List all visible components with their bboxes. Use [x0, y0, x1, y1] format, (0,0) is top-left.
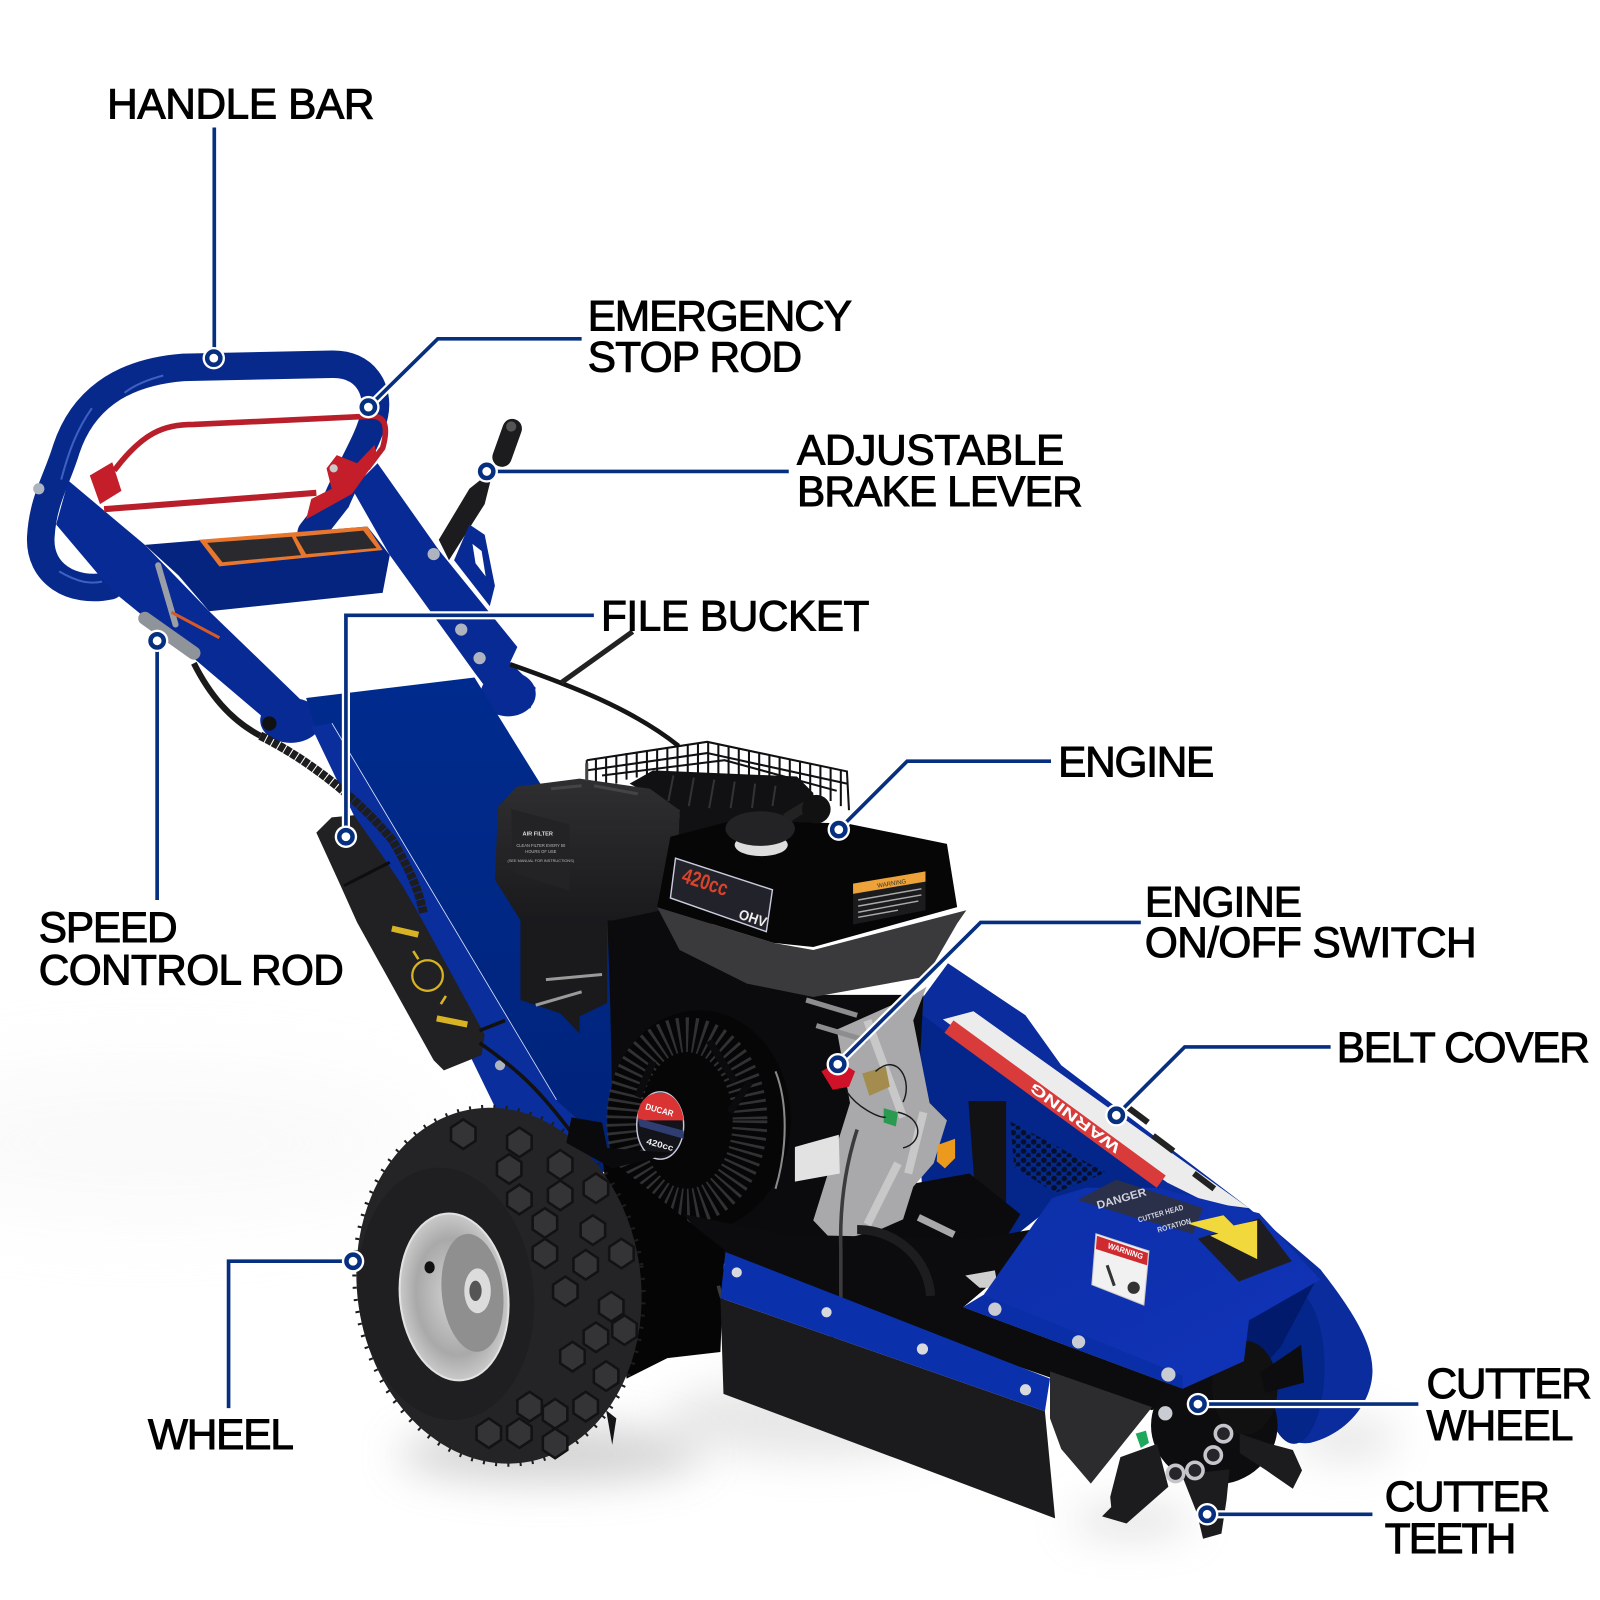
wires — [847, 1065, 918, 1148]
red on/off switch — [821, 1061, 855, 1090]
danger label — [1078, 1180, 1203, 1235]
420cc tank label: OHV — [737, 907, 769, 931]
warning sticker — [943, 1011, 1249, 1208]
callout: emergency stop rod: STOP ROD — [588, 333, 802, 380]
muffler wire guard — [587, 742, 849, 810]
red emergency stop rod — [90, 416, 385, 519]
tank warning label: WARNING — [877, 878, 907, 890]
black rubber skirt — [720, 1298, 1055, 1518]
file bucket cylinder — [316, 815, 485, 1070]
control cable — [194, 663, 260, 736]
hood flange — [963, 1295, 1183, 1389]
lower cable near bucket — [480, 1020, 571, 1133]
danger label: CUTTER HEAD — [1137, 1203, 1185, 1224]
hub — [436, 1231, 509, 1355]
callout: cutter wheel — [1187, 1360, 1592, 1449]
Ducar badge — [637, 1092, 684, 1159]
bolt and handle on deck — [857, 1217, 998, 1296]
rotation arrow panel — [1198, 1218, 1292, 1282]
frame cross plate — [145, 527, 390, 611]
callout: cutter teeth — [1196, 1473, 1550, 1562]
fuel cap — [726, 795, 831, 856]
callout: handle bar: HANDLE BAR — [107, 80, 374, 127]
420cc tank label — [670, 858, 772, 932]
callout: cutter wheel: WHEEL — [1427, 1402, 1573, 1449]
callout: belt cover — [1105, 1024, 1590, 1127]
warning sticker: WARNING — [1027, 1079, 1124, 1156]
callout: handle bar — [107, 80, 374, 369]
rod — [561, 632, 633, 683]
muffler — [630, 770, 816, 903]
tire — [334, 1089, 664, 1482]
orange safety decal — [199, 527, 383, 566]
callout: engine on/off switch: ENGINE — [1145, 878, 1302, 925]
pivot joint — [260, 698, 321, 743]
air filter: AIR FILTER — [523, 832, 553, 838]
belt cover back plate — [914, 963, 1372, 1443]
engine base deck — [684, 1214, 1183, 1410]
Ducar badge: DUCAR — [644, 1101, 675, 1119]
air filter — [495, 763, 680, 920]
callout: belt cover: BELT COVER — [1337, 1024, 1590, 1071]
callout: engine — [828, 739, 1214, 841]
callout: wheel — [148, 1250, 364, 1458]
floor shadows — [0, 1071, 1398, 1535]
air filter: (SEE MANUAL FOR INSTRUCTIONS) — [508, 858, 575, 863]
callout: speed control rod: SPEED — [39, 904, 178, 951]
frame right arm — [352, 463, 536, 713]
callout: emergency stop rod: EMERGENCY — [588, 293, 852, 340]
rim — [392, 1208, 517, 1386]
fuel tank top — [657, 820, 957, 947]
inner blue panel — [914, 1009, 1167, 1240]
tire sidewall — [345, 1159, 546, 1429]
green connector — [884, 1108, 898, 1127]
callout: file bucket: FILE BUCKET — [601, 593, 869, 640]
flange — [311, 723, 587, 1143]
engine upper parts — [806, 1000, 867, 1041]
callout: cutter teeth: TEETH — [1385, 1515, 1516, 1562]
callout: engine: ENGINE — [1058, 739, 1214, 786]
420cc tank label: 420cc — [679, 864, 731, 901]
yellow arrow — [1188, 1215, 1257, 1259]
main frame left arm — [56, 481, 318, 731]
wheel bracket — [566, 1117, 673, 1168]
speed control lever — [145, 565, 219, 653]
orange fuel knob — [937, 1139, 955, 1168]
ribbed hose — [260, 736, 423, 913]
pivot joint right — [481, 671, 536, 716]
black block behind wheel — [602, 1153, 724, 1379]
engine backing — [607, 898, 1020, 1307]
carburetor — [520, 920, 607, 1034]
engine body — [610, 927, 863, 1240]
air filter: CLEAN FILTER EVERY 50 — [516, 843, 566, 848]
cutter teeth — [1240, 1434, 1302, 1489]
engine white sticker — [795, 1135, 840, 1182]
bottom tooth — [1182, 1469, 1230, 1539]
left tooth — [1102, 1444, 1168, 1523]
cutter wheel — [1102, 1337, 1304, 1539]
callout: speed control rod: CONTROL ROD — [39, 947, 344, 994]
silver highlights — [867, 1020, 923, 1224]
bolts on frame — [33, 483, 505, 1070]
wheel — [332, 1088, 666, 1484]
cable from switch to skirt — [718, 1130, 857, 1356]
strip bolts — [732, 1267, 1031, 1395]
silver engine block — [813, 987, 947, 1242]
tire spikes — [332, 1088, 666, 1484]
valve — [424, 1261, 435, 1273]
gold box — [862, 1066, 890, 1096]
callout: emergency stop rod — [357, 293, 852, 418]
callout: speed control rod — [39, 630, 344, 994]
centre blue panel — [306, 678, 622, 1173]
vent holes — [1010, 1121, 1106, 1193]
air filter: HOURS OF USE — [525, 849, 557, 854]
green tag — [1136, 1431, 1149, 1448]
side skirt — [1050, 1371, 1152, 1484]
callout: adjustable brake lever: ADJUSTABLE — [797, 426, 1064, 473]
stump grinder machine — [33, 364, 1372, 1539]
black throttle cable — [510, 664, 679, 746]
cutter hood — [963, 1188, 1320, 1389]
drum inner disc — [1263, 1291, 1324, 1444]
panel white edge line — [332, 723, 556, 1100]
handle bar tube — [41, 364, 375, 588]
callout: engine on/off switch: ON/OFF SWITCH — [1145, 919, 1477, 966]
danger label: ROTATION — [1156, 1216, 1192, 1235]
callout: wheel: WHEEL — [148, 1411, 294, 1458]
brake lever — [439, 421, 516, 606]
callout: adjustable brake lever: BRAKE LEVER — [797, 468, 1083, 515]
hood bolts — [988, 1303, 1176, 1420]
tank warning label — [853, 871, 926, 924]
callout: cutter wheel: CUTTER — [1427, 1360, 1592, 1407]
callout: engine on/off switch — [827, 878, 1477, 1076]
muffler fins — [668, 776, 776, 808]
hood mouth shadow — [1240, 1276, 1318, 1393]
black mount post — [968, 1101, 1006, 1239]
hood warning sticker: WARNING — [1107, 1241, 1144, 1261]
hood warning sticker — [1092, 1234, 1149, 1305]
carbide nuts — [1167, 1426, 1232, 1482]
Ducar badge: 420cc — [645, 1136, 675, 1153]
danger label: DANGER — [1095, 1186, 1148, 1212]
fuel tank lower shell — [657, 907, 966, 997]
callout: adjustable brake lever — [476, 426, 1083, 515]
tire tread blocks — [451, 1119, 637, 1458]
callout: file bucket — [335, 593, 869, 848]
handle highlights — [59, 376, 163, 583]
callout: cutter teeth: CUTTER — [1385, 1473, 1550, 1520]
blue deflector strip — [720, 1252, 1050, 1411]
kickstand tip — [606, 1410, 616, 1445]
recoil starter fan — [607, 1010, 791, 1231]
